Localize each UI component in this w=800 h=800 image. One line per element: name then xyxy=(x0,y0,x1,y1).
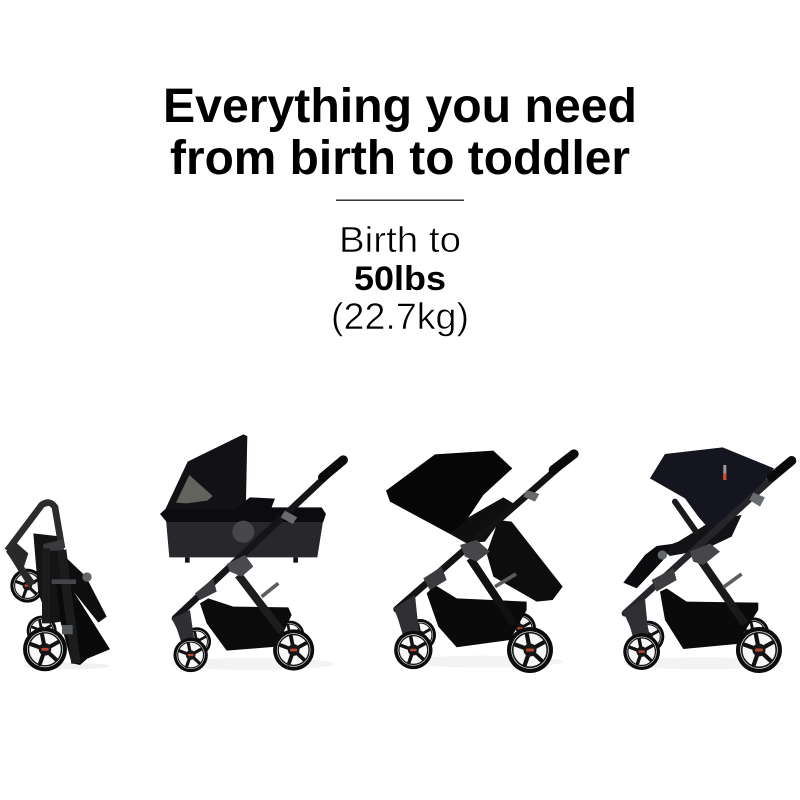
title xyxy=(163,80,637,185)
bumper bar xyxy=(675,502,696,532)
footmuff xyxy=(487,520,563,602)
canopy xyxy=(650,447,774,530)
seat xyxy=(450,497,513,543)
canopy tag xyxy=(723,465,726,480)
frame xyxy=(397,454,574,609)
carrycot hood xyxy=(165,434,247,510)
frame xyxy=(625,461,792,613)
basket xyxy=(200,598,292,651)
basket xyxy=(427,585,527,647)
basket xyxy=(660,588,758,649)
weight range text: 50lbs xyxy=(354,260,446,298)
seat and footrest xyxy=(660,515,742,556)
canopy xyxy=(386,451,512,534)
title: Everything you need xyxy=(163,80,637,133)
weight range text: Birth to xyxy=(339,219,461,260)
weight range text: (22.7kg) xyxy=(331,296,469,337)
frame xyxy=(175,461,343,618)
mesh window xyxy=(176,475,213,503)
title: from birth to toddler xyxy=(170,132,630,185)
stroller: carrycot mode xyxy=(160,434,343,672)
stroller: folded xyxy=(6,503,110,671)
stroller: parent-facing seat with footmuff xyxy=(386,451,574,673)
stroller: forward-facing seat xyxy=(623,447,792,673)
weight range text xyxy=(331,219,469,337)
carrycot body xyxy=(166,519,323,557)
